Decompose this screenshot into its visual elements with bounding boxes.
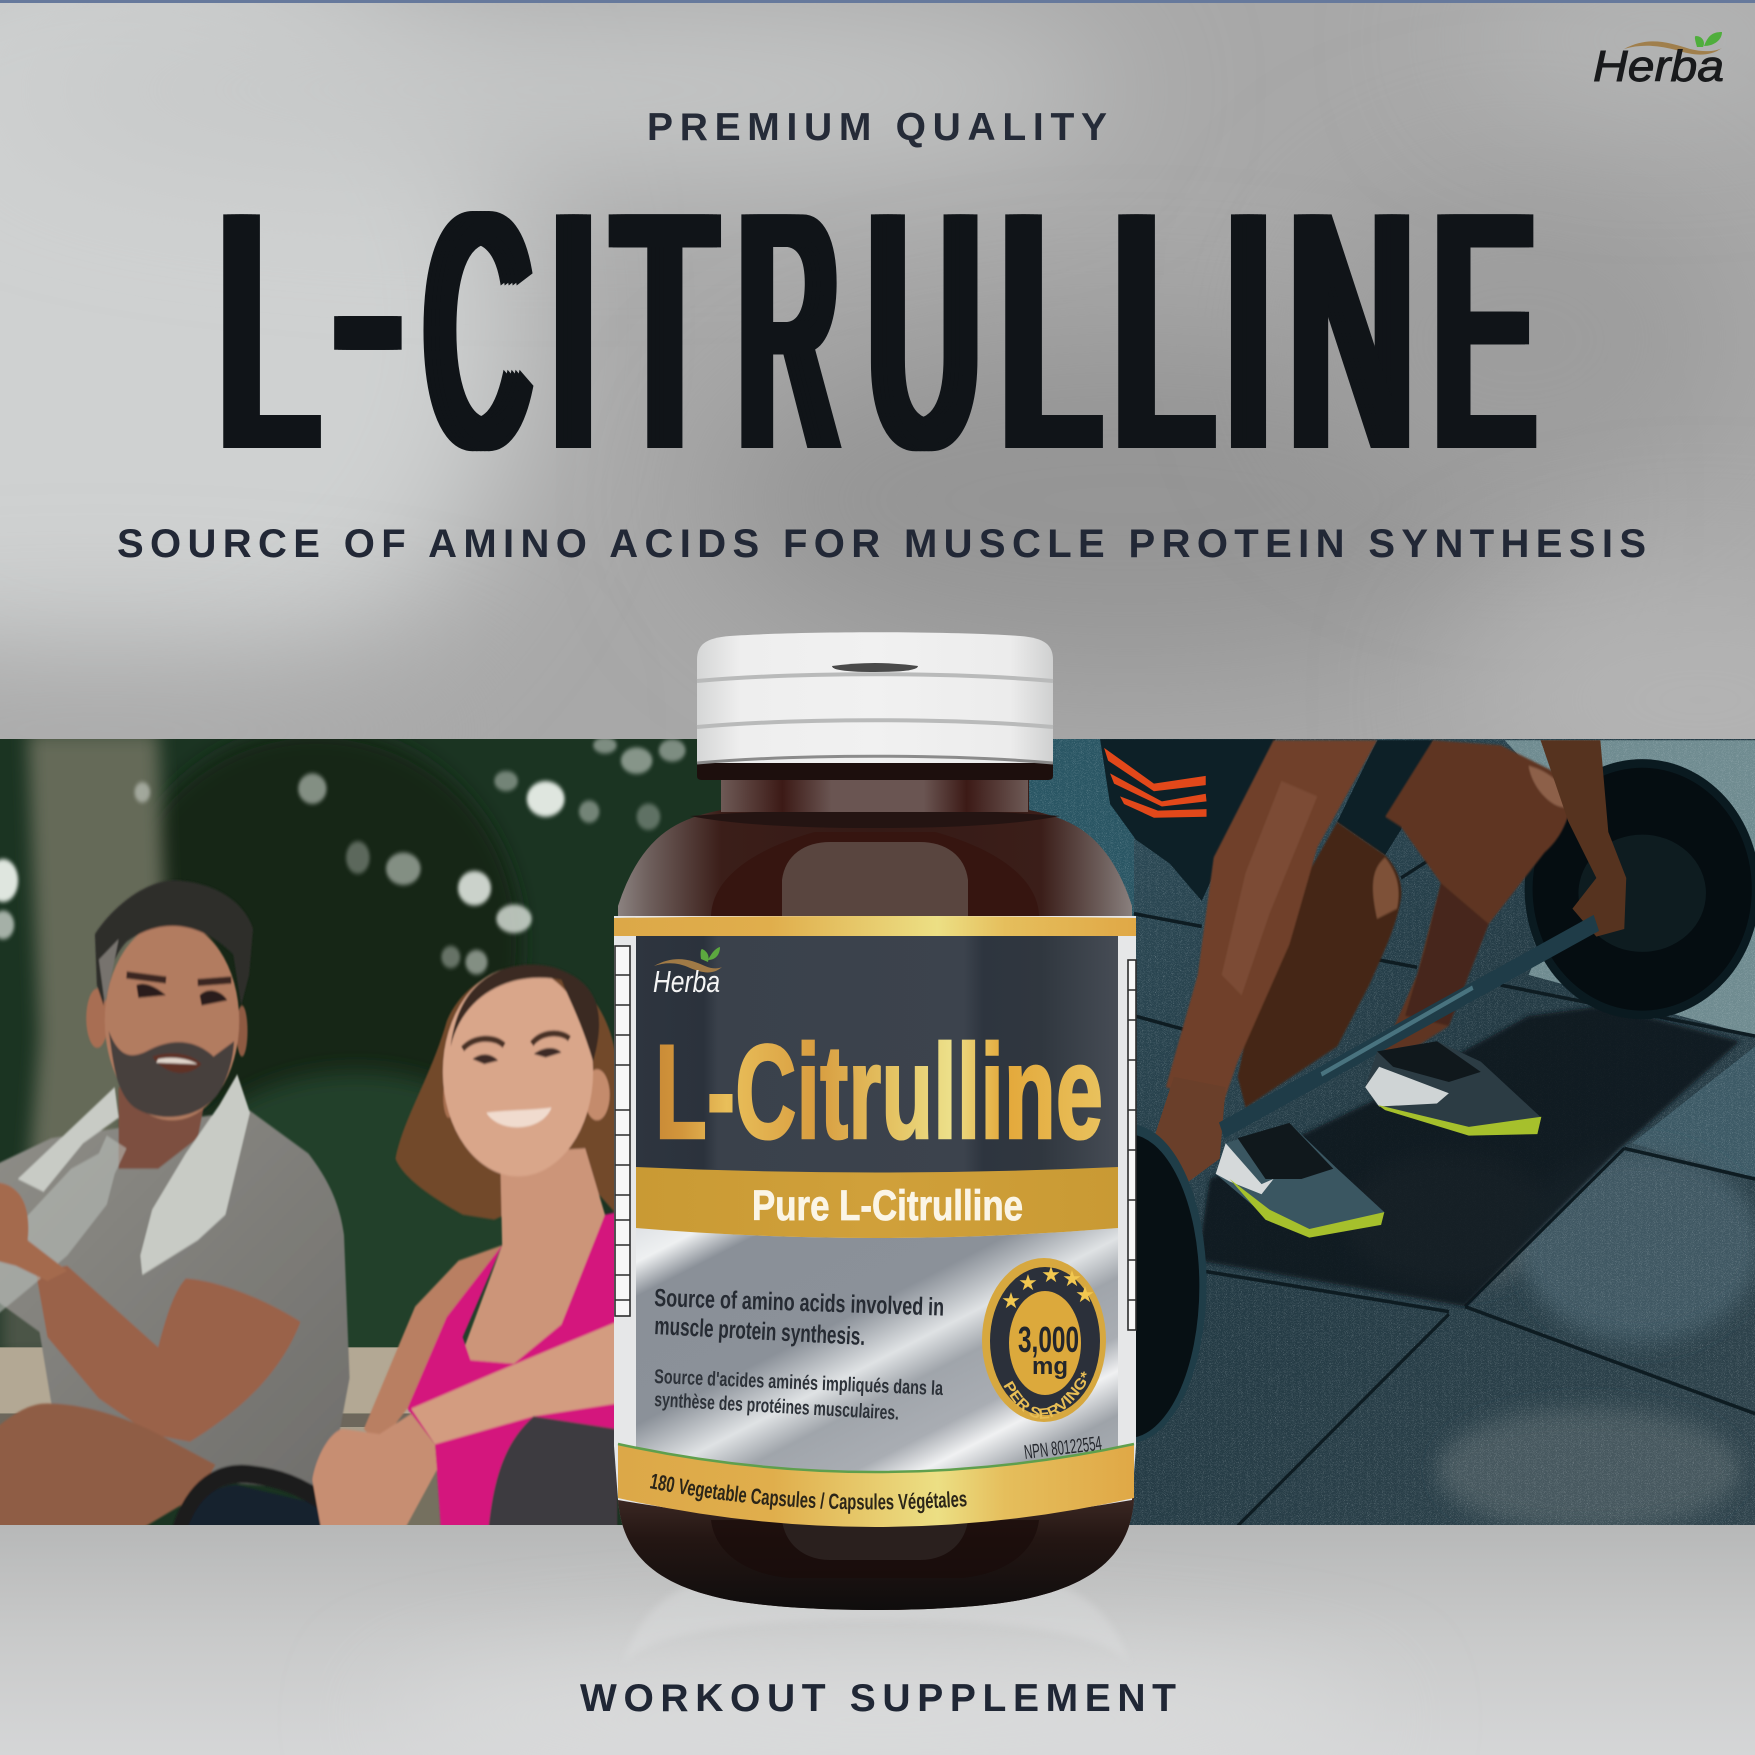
title: L-CITRULLINE: E <box>1435 147 1533 514</box>
bottle: base highlights <box>711 1520 1039 1578</box>
label: French claim: Source d'acides aminés impliqués dans la <box>654 1366 944 1400</box>
title: L-CITRULLINE: N <box>1290 147 1413 514</box>
front sneaker <box>1216 1123 1384 1238</box>
bottle: nutrition table strips <box>615 946 1136 1330</box>
title: L-CITRULLINE <box>0 167 1755 495</box>
foliage backdrop <box>0 739 721 1525</box>
title: L-CITRULLINE: T <box>615 147 714 514</box>
label: French claim <box>654 1366 944 1425</box>
man: dark shorts <box>188 1484 322 1525</box>
man: leg <box>0 1402 216 1525</box>
bottle: green line <box>618 1444 1134 1472</box>
bottle: bottom gold band <box>618 1444 1134 1527</box>
bottle: top gold band <box>614 916 1136 936</box>
man: chair arm <box>176 1474 328 1541</box>
product bottle <box>614 632 1137 1633</box>
man: neck <box>119 1087 206 1169</box>
woman: shoulder <box>364 1245 502 1444</box>
title: L-CITRULLINE: U <box>869 147 979 514</box>
shorts: orange stripes <box>1104 748 1207 818</box>
label: 3,000 mg badge: ★ <box>1018 1271 1038 1296</box>
background: brushed silver top panel <box>0 0 1755 820</box>
rear sneaker <box>1365 1041 1541 1136</box>
title: L-CITRULLINE: I <box>551 147 596 514</box>
title: L-CITRULLINE: I <box>1226 147 1271 514</box>
bottle: neck <box>721 776 1028 812</box>
bottle: gold strap <box>636 1167 1118 1238</box>
arms and hands <box>1154 740 1626 1187</box>
man: bottle-holding arm <box>36 1266 301 1442</box>
bottle: base reflection <box>622 1585 1130 1665</box>
figures soft wrapper <box>0 880 617 1557</box>
label: English claim <box>654 1284 945 1351</box>
bottle: silver label area <box>636 1228 1118 1474</box>
photo: man and woman resting on a park bench <box>0 739 721 1525</box>
label: 3,000 mg badge: ★ <box>1001 1289 1021 1314</box>
barbell bar <box>1222 923 1596 1131</box>
woman: back hair <box>395 967 617 1220</box>
bottle: bottom base <box>618 1480 1134 1610</box>
woman: pink tank top <box>407 1212 617 1557</box>
woman: hands <box>312 1414 437 1546</box>
subtitle: source of amino acids: SOURCE OF AMINO ACIDS FOR MUSCLE PROTEIN SYNTHESIS <box>117 522 1646 566</box>
caption: workout supplement: WORKOUT SUPPLEMENT <box>580 1677 1176 1720</box>
title: L-CITRULLINE: R <box>740 147 837 514</box>
title: L-CITRULLINE: L <box>1114 147 1212 514</box>
eyebrow: premium quality: PREMIUM QUALITY <box>647 106 1107 149</box>
title: L-CITRULLINE: L <box>219 147 317 514</box>
man: head <box>86 880 253 1120</box>
label: 3,000 mg badge: PER SERVING* <box>1004 1372 1086 1419</box>
label: 3,000 mg badge <box>982 1258 1106 1422</box>
bottle: amber glass body <box>618 778 1134 1610</box>
woman: face <box>443 965 610 1176</box>
label: 3,000 mg badge: 3,000 <box>1018 1319 1079 1360</box>
woman: neck and chest <box>459 1148 605 1375</box>
label: 3,000 mg badge: ★ <box>1062 1267 1082 1292</box>
label: French claim: synthèse des protéines musculaires. <box>654 1389 900 1425</box>
label: Herba logo: Herba <box>653 964 720 999</box>
floor shadow <box>1198 1006 1740 1307</box>
woman: legging <box>486 1416 617 1557</box>
label: pure L-Citrulline: Pure L-Citrulline <box>752 1182 1023 1230</box>
title: L-CITRULLINE: C <box>426 147 528 514</box>
label: capsule count: 180 Vegetable Capsules / Capsules Végétales <box>650 1474 967 1514</box>
label: Herba logo <box>653 947 722 999</box>
label: product name: L-Citrulline <box>655 1018 1103 1167</box>
man: water bottle and hand <box>0 1136 127 1332</box>
background: light silver bottom panel <box>0 1525 1755 1755</box>
logo: Herba top right: Herba <box>1593 42 1724 91</box>
man: shirt <box>0 1110 350 1490</box>
right barbell plate <box>1525 759 1755 1019</box>
title: L-CITRULLINE: - <box>336 123 400 490</box>
woman: forearm <box>411 1322 617 1444</box>
bottle: neck ring <box>697 758 1053 780</box>
label: NPN number: NPN 80122554 <box>1023 1433 1103 1464</box>
photo: athlete lifting a barbell on a gym floor <box>998 730 1755 1536</box>
label: 3,000 mg badge: ★ <box>1075 1283 1095 1308</box>
rubber floor <box>998 730 1755 1536</box>
label: English claim: Source of amino acids involved in <box>654 1284 945 1322</box>
bottle: white cap <box>697 632 1053 763</box>
bottle: dark title panel <box>636 936 1118 1173</box>
legs <box>1166 740 1571 1108</box>
label: 3,000 mg badge: ★ <box>1041 1263 1061 1288</box>
title: L-CITRULLINE: L <box>1001 147 1099 514</box>
label: 3,000 mg badge: mg <box>1032 1353 1068 1380</box>
bottle: label white edge <box>614 916 1136 1522</box>
man: towel <box>18 1074 250 1275</box>
left barbell plate <box>1053 1124 1207 1443</box>
bottle: shoulder reflections <box>690 809 1060 916</box>
bench <box>0 1347 451 1536</box>
shorts <box>1100 739 1433 901</box>
label: English claim: muscle protein synthesis. <box>654 1312 866 1351</box>
